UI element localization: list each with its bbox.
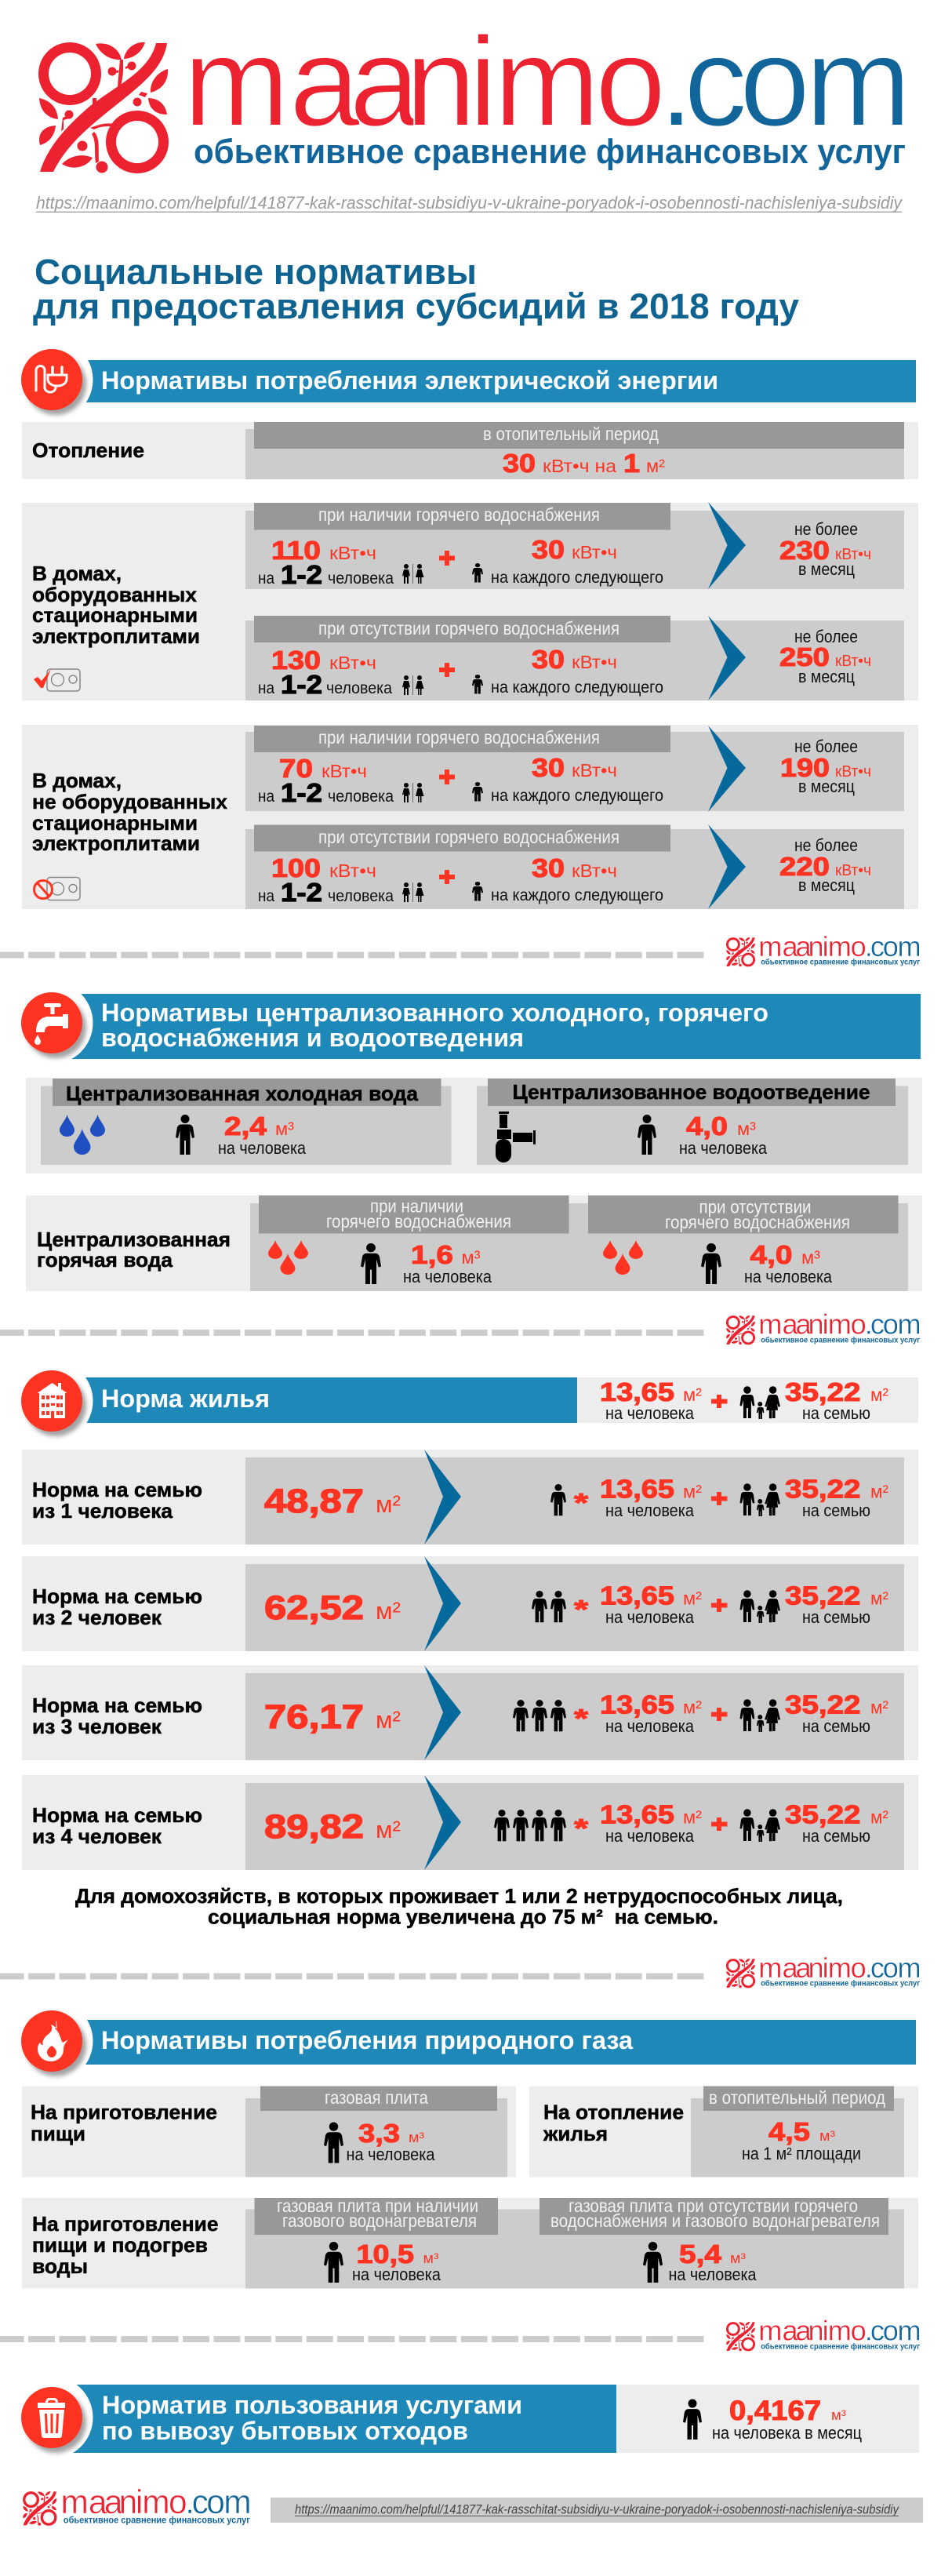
row: without hot water: не более [794,627,858,646]
row: with hot water: кВт•ч [572,760,617,780]
panel: gas heating: на 1 м² площади [742,2144,861,2163]
formula: на семью [802,1403,870,1423]
label: электроплитами [32,624,200,648]
panel: cooking and water heating: на человека [352,2265,441,2284]
row: family of 1: * [574,1488,588,1517]
row: with hot water: 1-2 [281,560,322,589]
panel: cooking and water heating: пищи и подогрев [32,2233,208,2257]
value: 0,4167 [729,2396,821,2426]
panel: heating row: Отопление [32,438,144,462]
source url: https://maanimo.com/helpful/141877-kak-rasschitat-subsidiyu-v-ukraine-poryadok-i-osobennosti-nachisleniya-subsidiy [36,193,903,213]
formula: 13,65 [600,1377,674,1406]
label: В домах, [32,562,122,585]
panel: hot water: на человека [744,1267,833,1286]
row: family of 2: на семью [802,1607,870,1627]
panel: cooking and water heating: газовая плита при наличии [277,2196,478,2216]
row: with hot water: при наличии горячего водоснабжения [318,727,600,748]
row: without hot water: 100 [271,853,321,882]
row: without hot water: 30 [532,853,565,882]
card: cold water [41,1079,452,1165]
row: with hot water: кВт•ч [322,761,367,781]
row: without hot water: на каждого следующего [491,886,663,904]
section heading: housing [11,1360,918,1442]
row: family of 3 [22,1665,918,1760]
row: family of 2: Норма на семью [32,1585,202,1608]
row: with hot water: кВт•ч [835,763,871,780]
panel: homes without electric stoves [22,725,918,909]
note [75,1884,843,1928]
small logo: maanimo [758,1308,867,1341]
card: cold water: на человека [218,1138,307,1158]
panel: heating row: 30 [503,449,536,478]
row: family of 4 [22,1775,918,1870]
card: drainage [477,1079,908,1165]
row: family of 1: 13,65 [600,1475,674,1503]
icon: stove crossed out [35,877,80,901]
row: family of 2 [22,1556,918,1651]
row: family of 2: 35,22 [785,1581,861,1610]
row: with hot water: 110 [271,536,321,565]
panel: gas cooking: на человека [347,2145,435,2164]
note: социальная норма увеличена до 75 м² на семью. [208,1905,718,1928]
row: without hot water: 250 [779,642,830,671]
row: with hot water: при наличии горячего водоснабжения [318,504,600,525]
row: with hot water: 30 [532,535,565,564]
footer logo: maanimo [61,2483,187,2520]
title [33,252,799,326]
label: Централизованная [37,1228,231,1251]
row: with hot water: на [258,569,274,588]
small logo: .com [865,1952,921,1984]
icon: building [38,1383,67,1418]
label [32,562,200,648]
row: with hot water [245,502,904,589]
row: family of 2: 62,52 [264,1589,364,1627]
row: family of 3: на человека [605,1716,695,1736]
panel: gas cooking: пищи [31,2122,85,2145]
formula: м² [683,1384,702,1405]
icon: red drops [603,1240,643,1275]
row: family of 4: 35,22 [785,1799,861,1829]
footer logo: .com [185,2483,252,2520]
row: family of 4: м² [683,1807,702,1828]
row: family of 2: м² [376,1597,401,1625]
header logo: .com [659,11,911,153]
section heading: electricity [11,339,916,420]
row: without hot water: человека [326,679,392,697]
row: family of 3: м² [870,1697,888,1718]
title: для предоставления субсидий в 2018 году [33,286,799,326]
section heading: water [11,982,921,1064]
row: family of 3: м² [376,1706,401,1734]
row: family of 1: на семью [802,1501,870,1520]
row: without hot water: кВт•ч [572,860,617,881]
panel: gas heating: жилья [543,2122,608,2145]
panel: gas heating: 4,5 [768,2117,810,2146]
row: family of 4: 89,82 [264,1808,364,1846]
small logo [726,1952,921,1988]
row: with hot water: человека [328,569,394,588]
row: family of 4: на человека [605,1826,695,1846]
panel: cooking and water heating: воды [32,2254,88,2278]
footer logo [23,2483,252,2526]
panel: gas cooking: газовая плита [325,2087,428,2108]
section heading: waste: Норматив пользования услугами [102,2391,522,2419]
label [32,769,228,855]
label: горячая вода [37,1248,173,1272]
label: стационарными [32,603,198,627]
row: family of 1: на человека [605,1501,695,1520]
panel: gas cooking: 3,3 [358,2119,400,2148]
row: without hot water: не более [794,835,858,855]
section heading: gas [11,2000,916,2082]
panel: hot water: 1,6 [411,1240,453,1269]
card: cold water: 2,4 [224,1112,267,1141]
section heading: waste [11,2377,919,2458]
small logo [726,1308,921,1344]
label: оборудованных [32,583,198,606]
panel: hot water: при наличии [370,1195,463,1216]
card: cold water: Централизованная холодная вода [66,1082,419,1105]
row: family of 1: Норма на семью [32,1478,202,1501]
value [683,2396,862,2443]
row: with hot water: 30 [532,753,565,782]
row: family of 3: 76,17 [264,1698,364,1736]
small logo: .com [865,2315,921,2347]
row: without hot water: при отсутствии горячего водоснабжения [318,827,619,847]
row: family of 1: из 1 человека [32,1499,173,1523]
panel: cooking and water heating: газового водонагревателя [282,2210,477,2231]
panel: hot water: м³ [461,1247,481,1268]
value: на человека в месяц [712,2423,862,2443]
row: without hot water: 220 [779,852,830,881]
panel: cooking and water heating: м³ [423,2250,439,2266]
row: without hot water: 30 [532,645,565,674]
icon: stove with check [34,669,80,691]
panel: cooking and water heating: м³ [730,2250,746,2266]
row: without hot water: кВт•ч [835,862,871,879]
row: without hot water: при отсутствии горячего водоснабжения [318,618,619,639]
small logo [726,2315,921,2351]
label: не оборудованных [32,790,228,813]
small logo: maanimo [758,930,867,962]
small logo: обьективное сравнение финансовых услуг [761,1336,920,1344]
row: family of 3: м² [683,1697,702,1718]
row: family of 1: м² [683,1481,702,1501]
header logo: обьективное сравнение финансовых услуг [194,133,906,171]
panel: cooking and water heating: 10,5 [356,2239,414,2269]
card: drainage: 4,0 [686,1112,728,1141]
value: м³ [831,2407,846,2423]
row: with hot water: кВт•ч [329,543,376,563]
card: drainage: м³ [737,1119,756,1139]
small logo: maanimo [758,2315,867,2347]
row: without hot water: кВт•ч [835,653,871,670]
panel: cooking and water heating: На приготовление [32,2212,218,2236]
section heading: housing: Норма жилья [101,1384,270,1413]
row: family of 2: на человека [605,1607,695,1627]
row: family of 3: Норма на семью [32,1694,202,1717]
row: family of 1: м² [870,1481,888,1501]
title: Социальные нормативы [35,252,477,292]
row: with hot water: в месяц [798,777,855,796]
row: family of 2: м² [870,1588,888,1608]
row: without hot water: кВт•ч [572,652,617,672]
small logo: обьективное сравнение финансовых услуг [761,1979,920,1988]
panel: hot water: при отсутствии [699,1197,811,1217]
panel: homes with electric stoves [22,502,918,700]
icon: faucet [35,1003,68,1045]
row: without hot water: кВт•ч [329,860,376,881]
row: family of 4: м² [376,1816,401,1843]
icon: plug [36,366,67,392]
row: family of 2: м² [683,1588,702,1608]
panel: cooking and water heating: на человека [668,2265,757,2284]
row: with hot water: не более [794,519,858,539]
row: family of 1: 48,87 [264,1483,364,1520]
icon: red drops [268,1240,308,1275]
row: family of 3: из 3 человек [32,1715,162,1738]
label: электроплитами [32,831,200,855]
header logo [38,11,911,173]
row: family of 4: Норма на семью [32,1803,202,1827]
row: family of 4: 13,65 [600,1799,674,1829]
row: family of 2: * [574,1595,588,1624]
row: with hot water: кВт•ч [835,546,871,563]
formula: на человека [605,1403,695,1423]
panel: heating row: 1 [623,449,640,478]
panel: gas heating: На отопление [543,2101,684,2124]
row: with hot water: на каждого следующего [491,569,663,587]
formula: 35,22 [785,1377,861,1406]
section heading: water: водоснабжения и водоотведения [101,1024,524,1052]
icon: blue drops [60,1115,105,1155]
label: В домах, [32,769,122,792]
row: without hot water [245,824,904,909]
formula [600,1377,888,1423]
panel: hot water [26,1195,922,1291]
row: family of 4: из 4 человек [32,1825,162,1848]
row: with hot water: в месяц [798,559,855,579]
card: drainage: Централизованное водоотведение [513,1080,870,1104]
panel: gas heating: м³ [819,2128,835,2144]
row: without hot water: 130 [271,646,321,675]
row: with hot water: 190 [780,753,830,782]
row: family of 4: м² [870,1807,888,1828]
row: with hot water: кВт•ч [572,542,617,562]
section heading: electricity: Нормативы потребления электрической энергии [101,366,718,395]
label [37,1228,231,1272]
panel: cooking and water heating: газовая плита при отсутствии горячего [569,2196,858,2216]
panel: hot water: горячего водоснабжения [665,1212,850,1232]
row: with hot water: на каждого следующего [491,787,663,805]
row: with hot water: не более [794,737,858,756]
section heading: waste: по вывозу бытовых отходов [102,2417,468,2445]
panel: gas cooking: На приготовление [31,2101,217,2124]
row: without hot water: 1-2 [281,670,322,699]
row: without hot water: на каждого следующего [491,679,663,697]
icon: trash bin [38,2398,65,2438]
panel: cooking and water heating: водоснабжения и газового водонагревателя [550,2210,880,2231]
row: without hot water: человека [328,887,394,905]
row: without hot water: кВт•ч [329,653,376,673]
row: without hot water: на [258,887,274,905]
small logo: обьективное сравнение финансовых услуг [761,958,920,966]
row: family of 3: 13,65 [600,1690,674,1719]
panel: hot water: 4,0 [750,1240,792,1269]
section heading: water: Нормативы централизованного холодного, горячего [101,999,768,1027]
card: drainage: на человека [679,1138,768,1158]
row: family of 1: 35,22 [785,1475,861,1503]
small logo: .com [865,930,921,962]
small logo: .com [865,1308,921,1341]
panel: gas cooking [22,2087,516,2178]
row: family of 3: * [574,1704,588,1733]
note: Для домохозяйств, в которых проживает 1 или 2 нетрудоспособных лица, [75,1884,843,1908]
label: стационарными [32,811,198,835]
card: cold water: м³ [275,1119,294,1139]
row: family of 3: 35,22 [785,1690,861,1719]
panel: heating row: в отопительный период [483,424,659,444]
footer url bar [271,2498,923,2523]
row: with hot water: на [258,788,274,806]
row: family of 1 [22,1450,918,1545]
panel: heating row: кВт•ч на [543,456,616,476]
row: family of 2: из 2 человек [32,1606,162,1629]
row: without hot water [245,616,904,700]
row: without hot water: в месяц [798,875,855,895]
section heading: gas: Нормативы потребления природного газа [101,2026,633,2054]
small logo [726,930,921,966]
row: family of 4: * [574,1814,588,1843]
small logo: обьективное сравнение финансовых услуг [761,2342,920,2351]
row: with hot water: 70 [279,754,313,783]
formula: м² [870,1384,888,1405]
panel: gas cooking: м³ [409,2130,424,2145]
icon: flame [38,2020,68,2061]
panel: hot water: м³ [801,1247,820,1268]
row: without hot water: 1-2 [281,878,322,907]
panel: gas heating [529,2087,918,2178]
row: without hot water: в месяц [798,667,855,686]
panel: cold water and drainage [26,1078,922,1173]
panel: gas heating: в отопительный период [709,2087,886,2108]
row: family of 2: 13,65 [600,1581,674,1610]
panel: cooking and water heating: 5,4 [679,2239,722,2269]
panel: cooking and water heating [22,2196,918,2289]
panel: heating row [22,422,918,479]
small logo: maanimo [758,1952,867,1984]
panel: hot water: на человека [403,1267,492,1286]
icon: siphon [496,1112,536,1162]
row: with hot water: человека [328,788,394,806]
panel: hot water: горячего водоснабжения [326,1211,511,1232]
row: family of 3: на семью [802,1716,870,1736]
row: with hot water: 230 [779,536,830,565]
footer logo: обьективное сравнение финансовых услуг [64,2516,250,2525]
row: family of 1: м² [376,1490,401,1518]
row: with hot water [245,726,904,812]
panel: heating row: м² [646,456,665,476]
row: without hot water: на [258,679,274,697]
row: family of 4: на семью [802,1826,870,1846]
header logo: maanimo [183,11,666,153]
row: with hot water: 1-2 [281,778,322,807]
